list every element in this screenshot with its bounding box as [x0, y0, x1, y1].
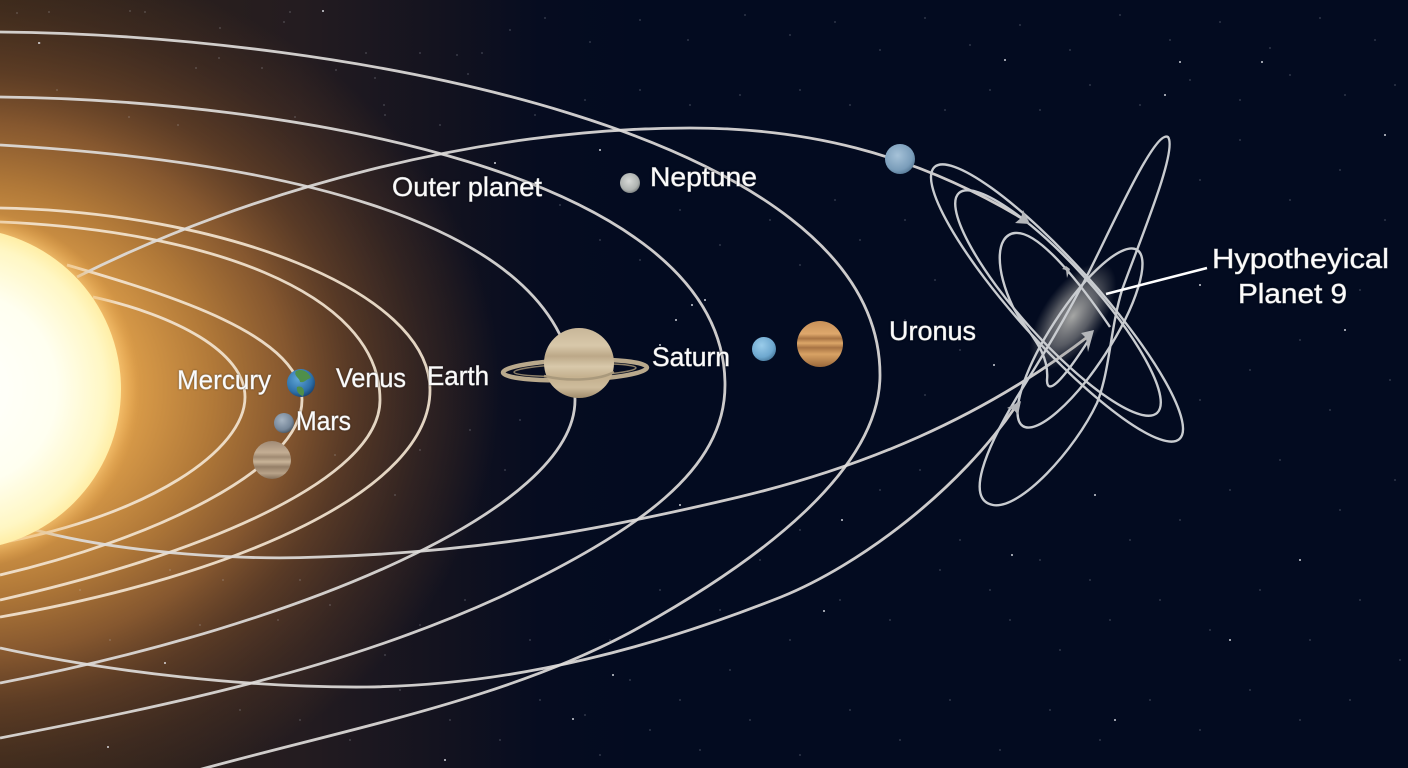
planet: pale blue: [752, 337, 776, 361]
label: Hypothetical Planet 9: [1212, 243, 1389, 309]
label: Outer planet: Outer planet: [392, 172, 543, 202]
planet: small grey: [620, 173, 640, 193]
label: Hypothetical Planet 9: Hypotheyical: [1212, 243, 1389, 274]
eccentric orbits converging on Planet 9: [0, 128, 1090, 687]
planet: orange banded: [797, 321, 843, 367]
planet: small grey-blue: [274, 413, 294, 433]
sun: [0, 209, 140, 569]
clustered distant object orbits: [905, 137, 1209, 505]
label: Uronus: Uronus: [889, 316, 976, 346]
planet: Saturn with rings: [503, 328, 647, 398]
label: Saturn: Saturn: [652, 342, 730, 372]
label: Neptune: Neptune: [650, 162, 757, 192]
outer orbits: Jupiter to Neptune: [0, 32, 880, 768]
label: Earth: Earth: [427, 361, 489, 391]
planet: blue-grey on eccentric orbit: [885, 144, 915, 174]
leader line to Planet 9: [1106, 268, 1207, 294]
inner orbits: Mercury to Mars: [0, 208, 430, 617]
planet: Earth-like: [287, 369, 315, 397]
Planet 9 gravitational glow: [1013, 248, 1133, 384]
label: Mercury: Mercury: [177, 365, 272, 395]
planet: banded tan: [253, 441, 291, 479]
orbit direction arrows: [1007, 210, 1094, 415]
labels: [177, 162, 1389, 436]
label: Mars: Mars: [296, 406, 351, 436]
label: Hypothetical Planet 9: Planet 9: [1238, 278, 1347, 309]
label: Venus: Venus: [336, 363, 406, 393]
